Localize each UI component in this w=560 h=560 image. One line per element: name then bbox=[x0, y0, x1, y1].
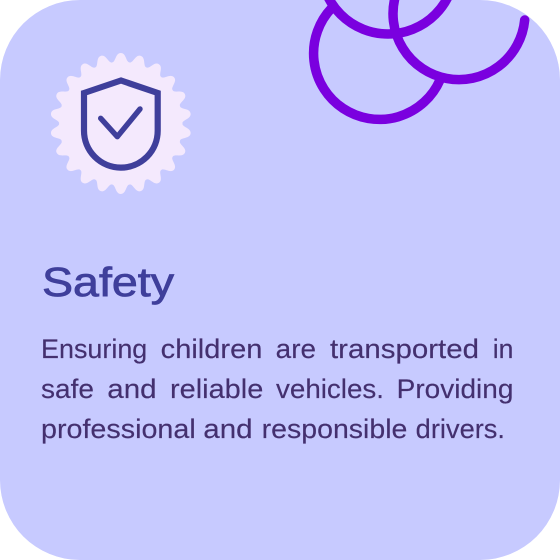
text block: description: and bbox=[107, 374, 157, 404]
text block: description: children bbox=[161, 334, 262, 364]
heading: Safety: Safety bbox=[42, 259, 175, 305]
text block: description: and bbox=[203, 414, 253, 444]
text block: description: are bbox=[276, 334, 316, 364]
text block: description: reliable bbox=[170, 374, 263, 404]
icon: scalloped seal bbox=[50, 53, 192, 194]
text block: description: responsible bbox=[262, 414, 407, 444]
text block: description: drivers. bbox=[416, 414, 505, 444]
text block: description: in bbox=[493, 334, 513, 364]
text block: description: Ensuring bbox=[41, 334, 147, 364]
text block: description: vehicles. bbox=[276, 374, 384, 404]
text block: description: professional bbox=[41, 414, 196, 444]
text block: description bbox=[41, 334, 513, 444]
icon: check mark bbox=[101, 109, 140, 137]
text block: description: transported bbox=[330, 334, 479, 364]
text block: description: safe bbox=[41, 374, 94, 404]
text block: description: Providing bbox=[397, 374, 513, 404]
decorative interlocking purple rings bbox=[314, 0, 525, 119]
icon: shield outline bbox=[84, 80, 158, 168]
icon: safety badge with shield and check bbox=[50, 53, 192, 194]
